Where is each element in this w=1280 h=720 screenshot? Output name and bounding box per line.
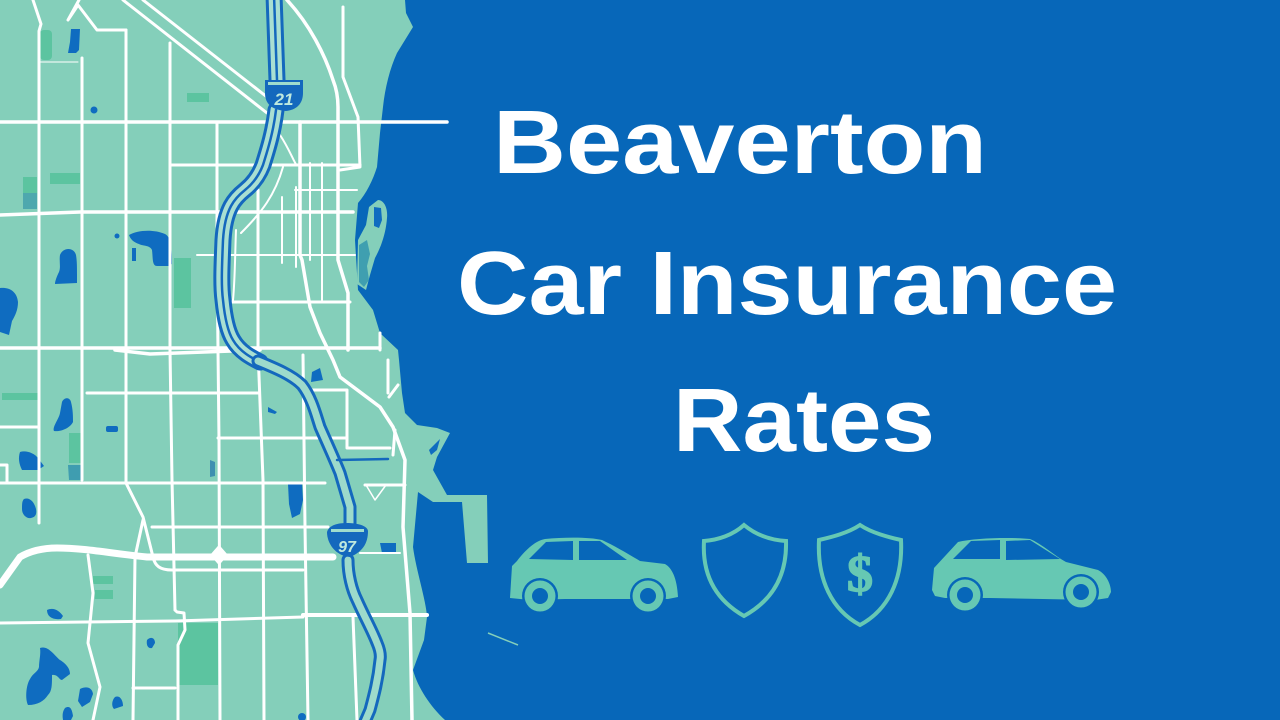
interstate shield south [327,523,368,557]
lake water [355,0,1280,720]
interstate shield north [265,80,303,111]
highway casing south [258,361,380,720]
shield number: 21 [274,90,293,109]
title line 3: Rates [673,371,935,471]
icon: car right [932,538,1111,613]
icon row [510,525,1111,625]
jetty [429,439,440,455]
highway median north [222,0,277,362]
diagonal and old roads [123,0,267,113]
icon: car left [510,538,678,614]
water streak [488,633,518,645]
downtown street grid [241,135,297,233]
highway center line north [222,0,277,362]
highway spur [337,459,388,460]
dollar sign: $ [847,546,873,603]
interstate highway [222,0,388,720]
shield number: 97 [338,539,357,556]
road network [0,0,447,720]
title line 1: Beaverton [493,93,987,193]
title [457,93,1117,471]
map land background [0,0,520,720]
icon: shield [704,525,786,616]
highway casing north [222,0,277,362]
main east-west roads [0,120,447,124]
north-south roads [33,0,41,523]
lakes [0,29,396,720]
lakefront island [357,200,387,290]
parks [2,30,218,685]
title line 2: Car Insurance [457,234,1117,334]
highway median south [258,361,380,720]
icon: shield with dollar [819,525,901,625]
